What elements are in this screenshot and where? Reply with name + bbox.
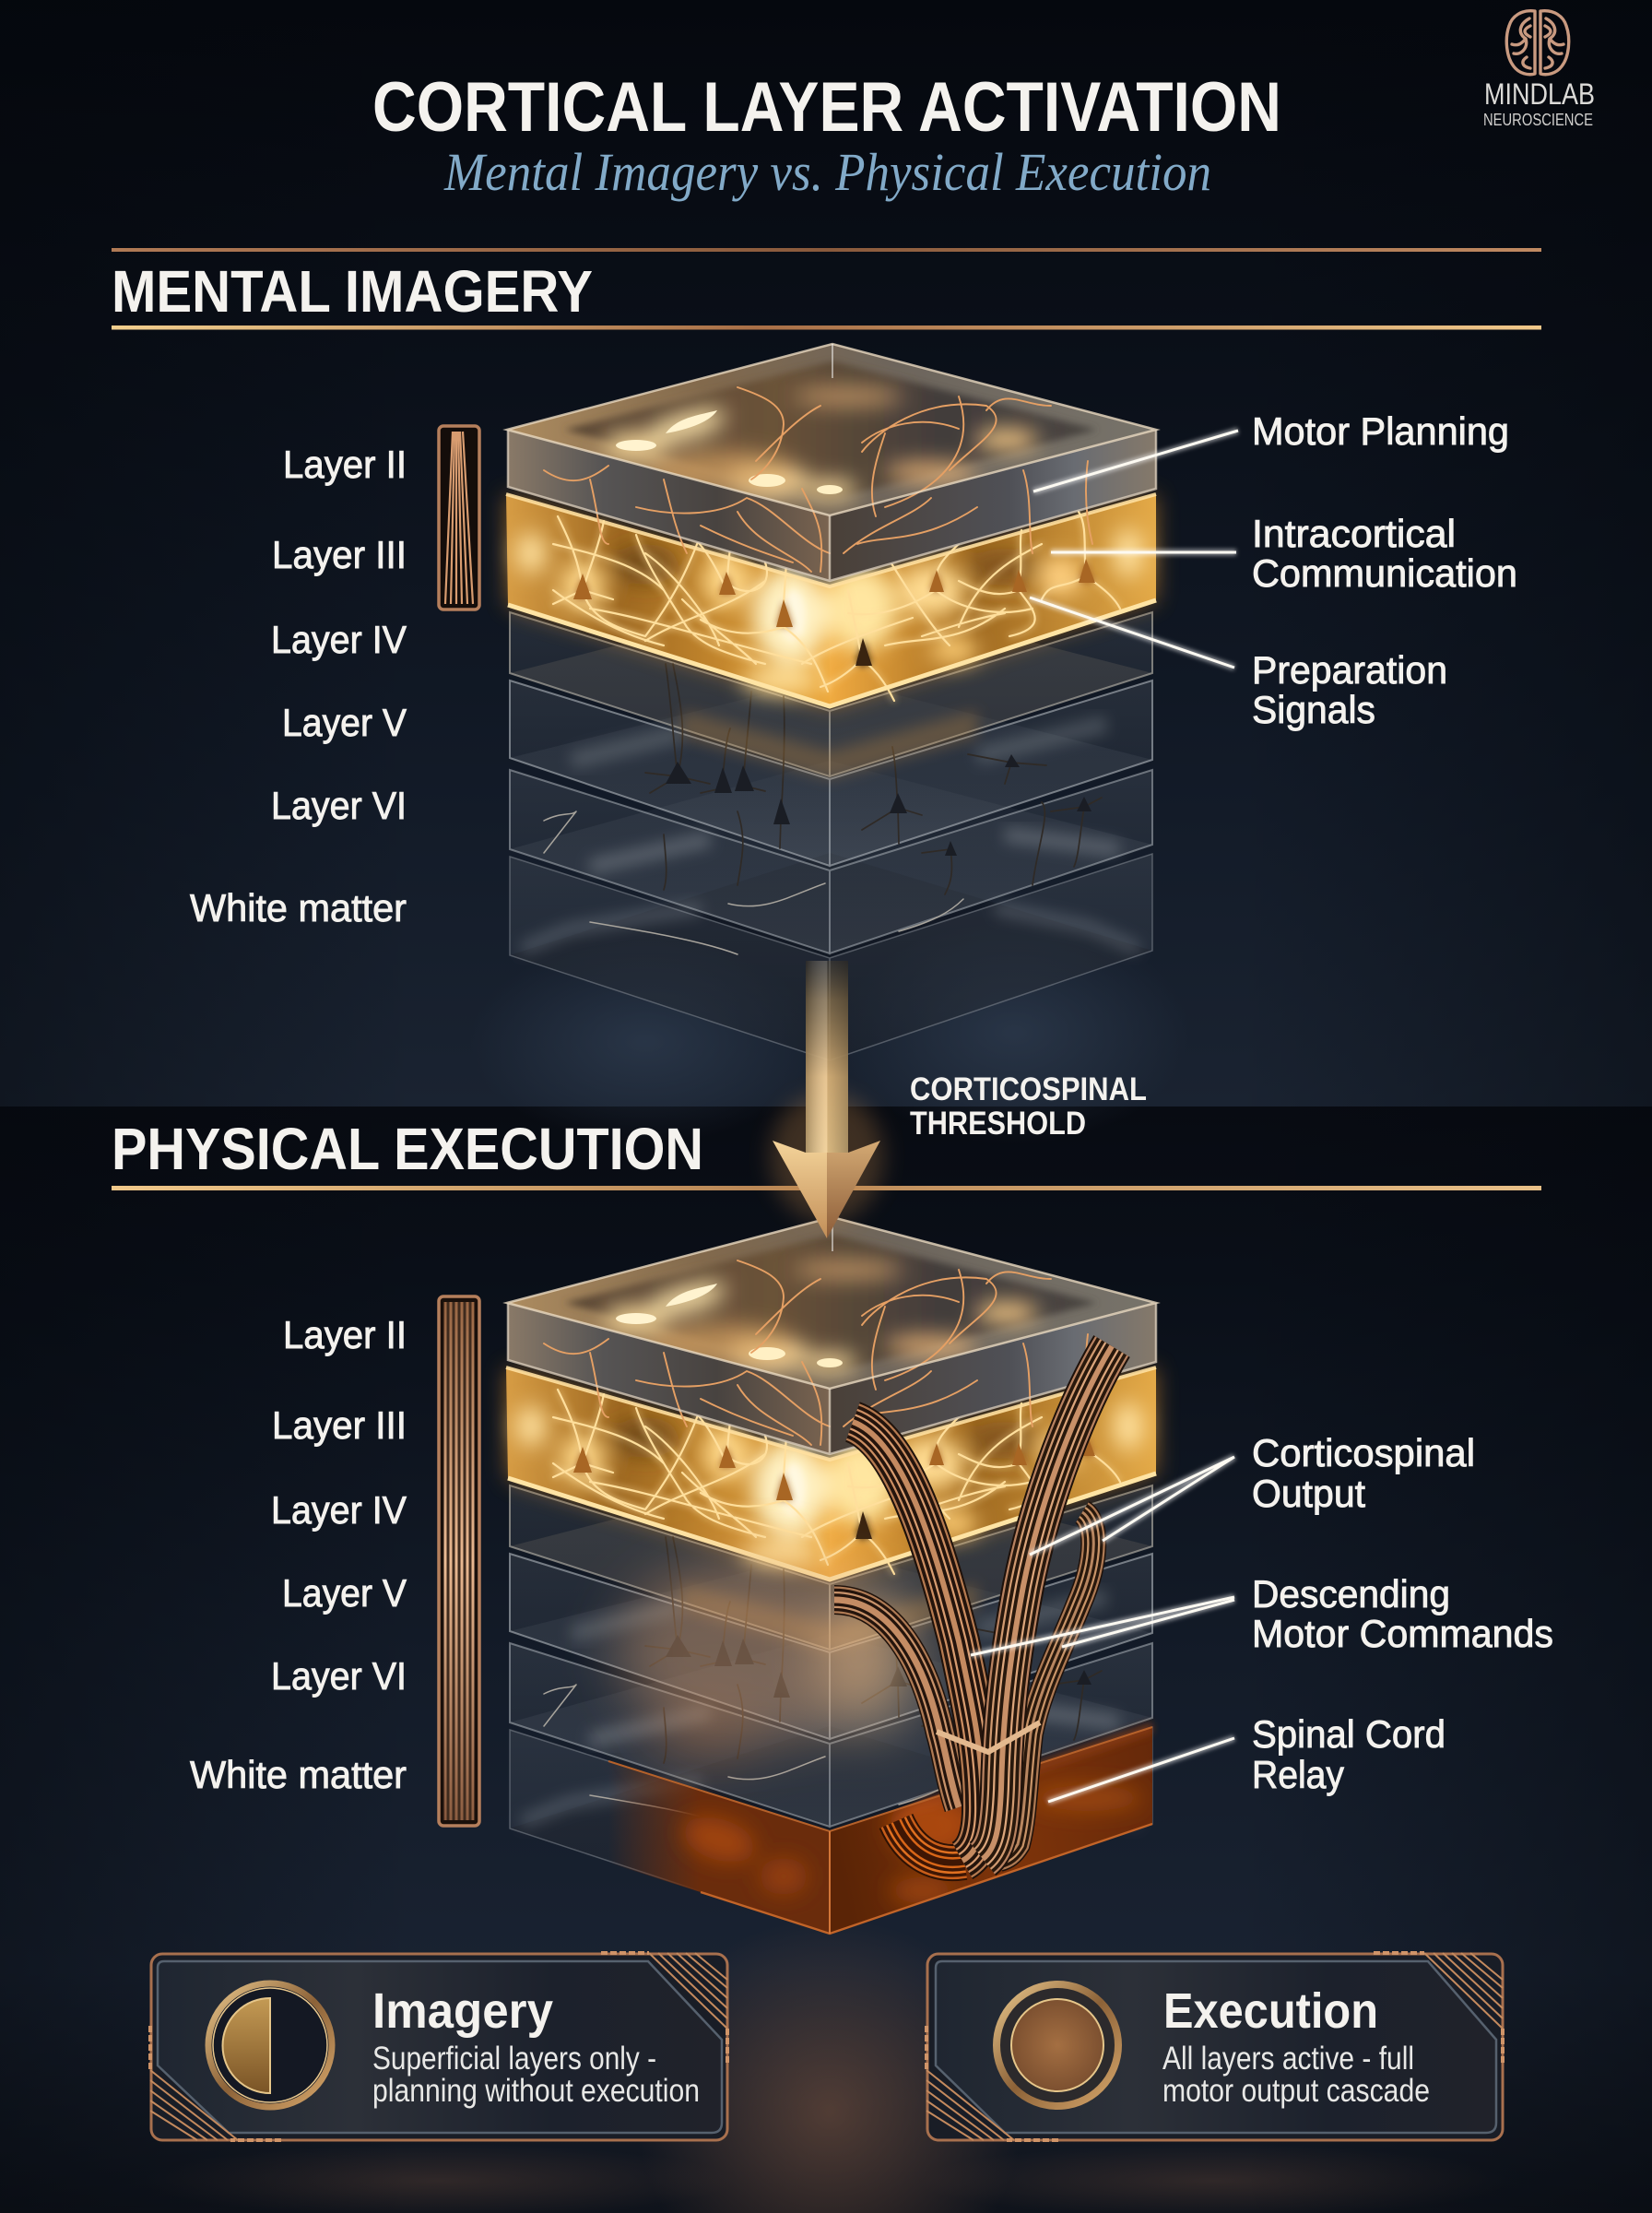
card: execution	[926, 1953, 1503, 2140]
rule: mental imagery	[112, 325, 1541, 330]
arrow: corticospinal threshold	[770, 961, 884, 1238]
icon: full disc	[997, 1984, 1118, 2106]
cortical block: mental imagery	[506, 344, 1156, 1060]
logo subtitle: NEUROSCIENCE	[1483, 111, 1593, 129]
card text	[372, 2041, 700, 2109]
card text: All layers active - full	[1162, 2041, 1414, 2077]
threshold label	[910, 1071, 1147, 1142]
cortical block: physical execution	[506, 1217, 1156, 1934]
background: lower panel	[0, 1106, 1652, 2213]
block floor reflections	[470, 922, 1189, 1143]
warm glow through lower layers	[618, 1558, 921, 1770]
background: upper panel	[0, 0, 1652, 1106]
layer labels: physical execution: Layer VI	[271, 1654, 407, 1698]
card text: planning without execution	[372, 2073, 700, 2109]
callouts: mental imagery: Signals	[1252, 688, 1375, 731]
white matter: orange relay	[608, 1722, 1152, 1934]
subtitle: Mental Imagery vs. Physical Execution	[443, 142, 1211, 202]
rule: physical execution	[112, 1186, 1541, 1190]
callouts: mental imagery: Communication	[1252, 551, 1517, 595]
callouts: physical execution: Output	[1252, 1472, 1365, 1515]
title: CORTICAL LAYER ACTIVATION	[372, 68, 1281, 147]
icon: half disc	[208, 1983, 332, 2107]
card text: motor output cascade	[1162, 2073, 1430, 2109]
rule: top	[112, 248, 1541, 252]
layer labels: physical execution: Layer V	[282, 1571, 407, 1615]
callouts: physical execution: Motor Commands	[1252, 1612, 1553, 1655]
layer labels: mental imagery: Layer IV	[271, 618, 407, 661]
activity bar: physical execution	[439, 1296, 479, 1826]
layer labels: mental imagery: Layer V	[282, 701, 407, 744]
callouts: mental imagery: Motor Planning	[1252, 409, 1509, 453]
layer labels: mental imagery: White matter	[190, 886, 407, 929]
card: imagery	[150, 1953, 727, 2140]
callouts: physical execution: Spinal Cord	[1252, 1712, 1446, 1756]
layer labels: physical execution: Layer III	[272, 1403, 407, 1447]
layer labels: physical execution	[190, 1313, 407, 1796]
card title: Imagery	[372, 1983, 553, 2039]
warm floor column	[636, 1918, 1023, 2213]
card floor reflections	[144, 2144, 1508, 2213]
layer labels: mental imagery: Layer III	[272, 533, 407, 576]
layer labels: physical execution: Layer II	[283, 1313, 407, 1356]
layer labels: mental imagery	[190, 443, 407, 929]
logo wordmark: MINDLAB	[1484, 77, 1595, 111]
callouts: mental imagery	[1030, 409, 1517, 731]
layer labels: physical execution: White matter	[190, 1753, 407, 1796]
copper motor wire bundles	[834, 1346, 1112, 1863]
heading: physical execution: PHYSICAL EXECUTION	[112, 1116, 703, 1182]
callouts: mental imagery: Intracortical	[1252, 512, 1456, 555]
callouts: mental imagery: Preparation	[1252, 648, 1447, 692]
threshold label: CORTICOSPINAL	[910, 1071, 1147, 1107]
callouts: physical execution: Descending	[1252, 1572, 1450, 1615]
card title: Execution	[1163, 1983, 1378, 2039]
card text: Superficial layers only -	[372, 2041, 656, 2077]
icon: brain	[1506, 11, 1569, 75]
layer labels: mental imagery: Layer VI	[271, 784, 407, 827]
layer labels: physical execution: Layer IV	[271, 1488, 407, 1532]
layer labels: mental imagery: Layer II	[283, 443, 407, 486]
callouts: physical execution	[971, 1431, 1553, 1802]
threshold label: THRESHOLD	[910, 1106, 1086, 1142]
heading: mental imagery: MENTAL IMAGERY	[112, 258, 593, 325]
logo	[1483, 11, 1595, 129]
activity bar: mental imagery	[439, 426, 479, 609]
card text	[1162, 2041, 1430, 2109]
callouts: physical execution: Corticospinal	[1252, 1431, 1475, 1474]
callouts: physical execution: Relay	[1252, 1753, 1344, 1796]
